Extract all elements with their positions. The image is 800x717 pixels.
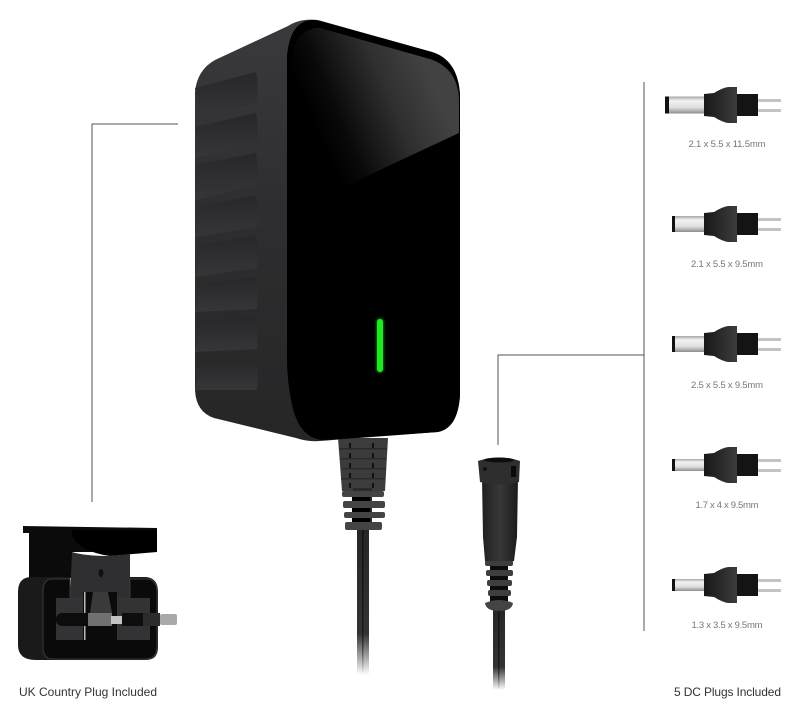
plug 3 size: 2.5 x 5.5 x 9.5mm (691, 380, 763, 391)
adapter side housing (195, 20, 460, 441)
connector bellows (485, 558, 513, 611)
plug 4 (672, 447, 781, 483)
connector head (478, 458, 520, 484)
glossy front face (287, 20, 460, 440)
green LED indicator (376, 318, 384, 373)
DC connector with cable (478, 458, 520, 690)
left leader line (92, 124, 178, 502)
DC plugs caption: 5 DC Plugs Included (674, 685, 781, 699)
plug 3 (672, 326, 781, 362)
adapter body (195, 20, 460, 441)
side grip ribs (195, 72, 258, 390)
plug 2 (672, 206, 781, 242)
connector grip (482, 478, 518, 561)
plug inner recess (56, 598, 150, 640)
UK country plug (18, 526, 177, 660)
plug 5 (672, 567, 781, 603)
right bracket leader line (498, 82, 644, 631)
plug housing (18, 577, 158, 660)
plug 1 (665, 87, 781, 123)
UK plug caption: UK Country Plug Included (19, 685, 157, 699)
plug 4 size: 1.7 x 4 x 9.5mm (696, 500, 759, 511)
plug 5 size: 1.3 x 3.5 x 9.5mm (692, 620, 763, 631)
plug 2 size: 2.1 x 5.5 x 9.5mm (691, 259, 763, 270)
plug rear clip (23, 526, 157, 578)
adapter cable (357, 528, 369, 675)
adapter strain relief (338, 438, 388, 530)
plug screw hole (98, 569, 104, 577)
plug back plate (70, 552, 130, 600)
front face highlight (292, 28, 459, 211)
plug pins (56, 613, 177, 626)
plug 1 size: 2.1 x 5.5 x 11.5mm (688, 139, 766, 150)
plug top tab (72, 530, 157, 556)
connector cable (493, 608, 505, 690)
